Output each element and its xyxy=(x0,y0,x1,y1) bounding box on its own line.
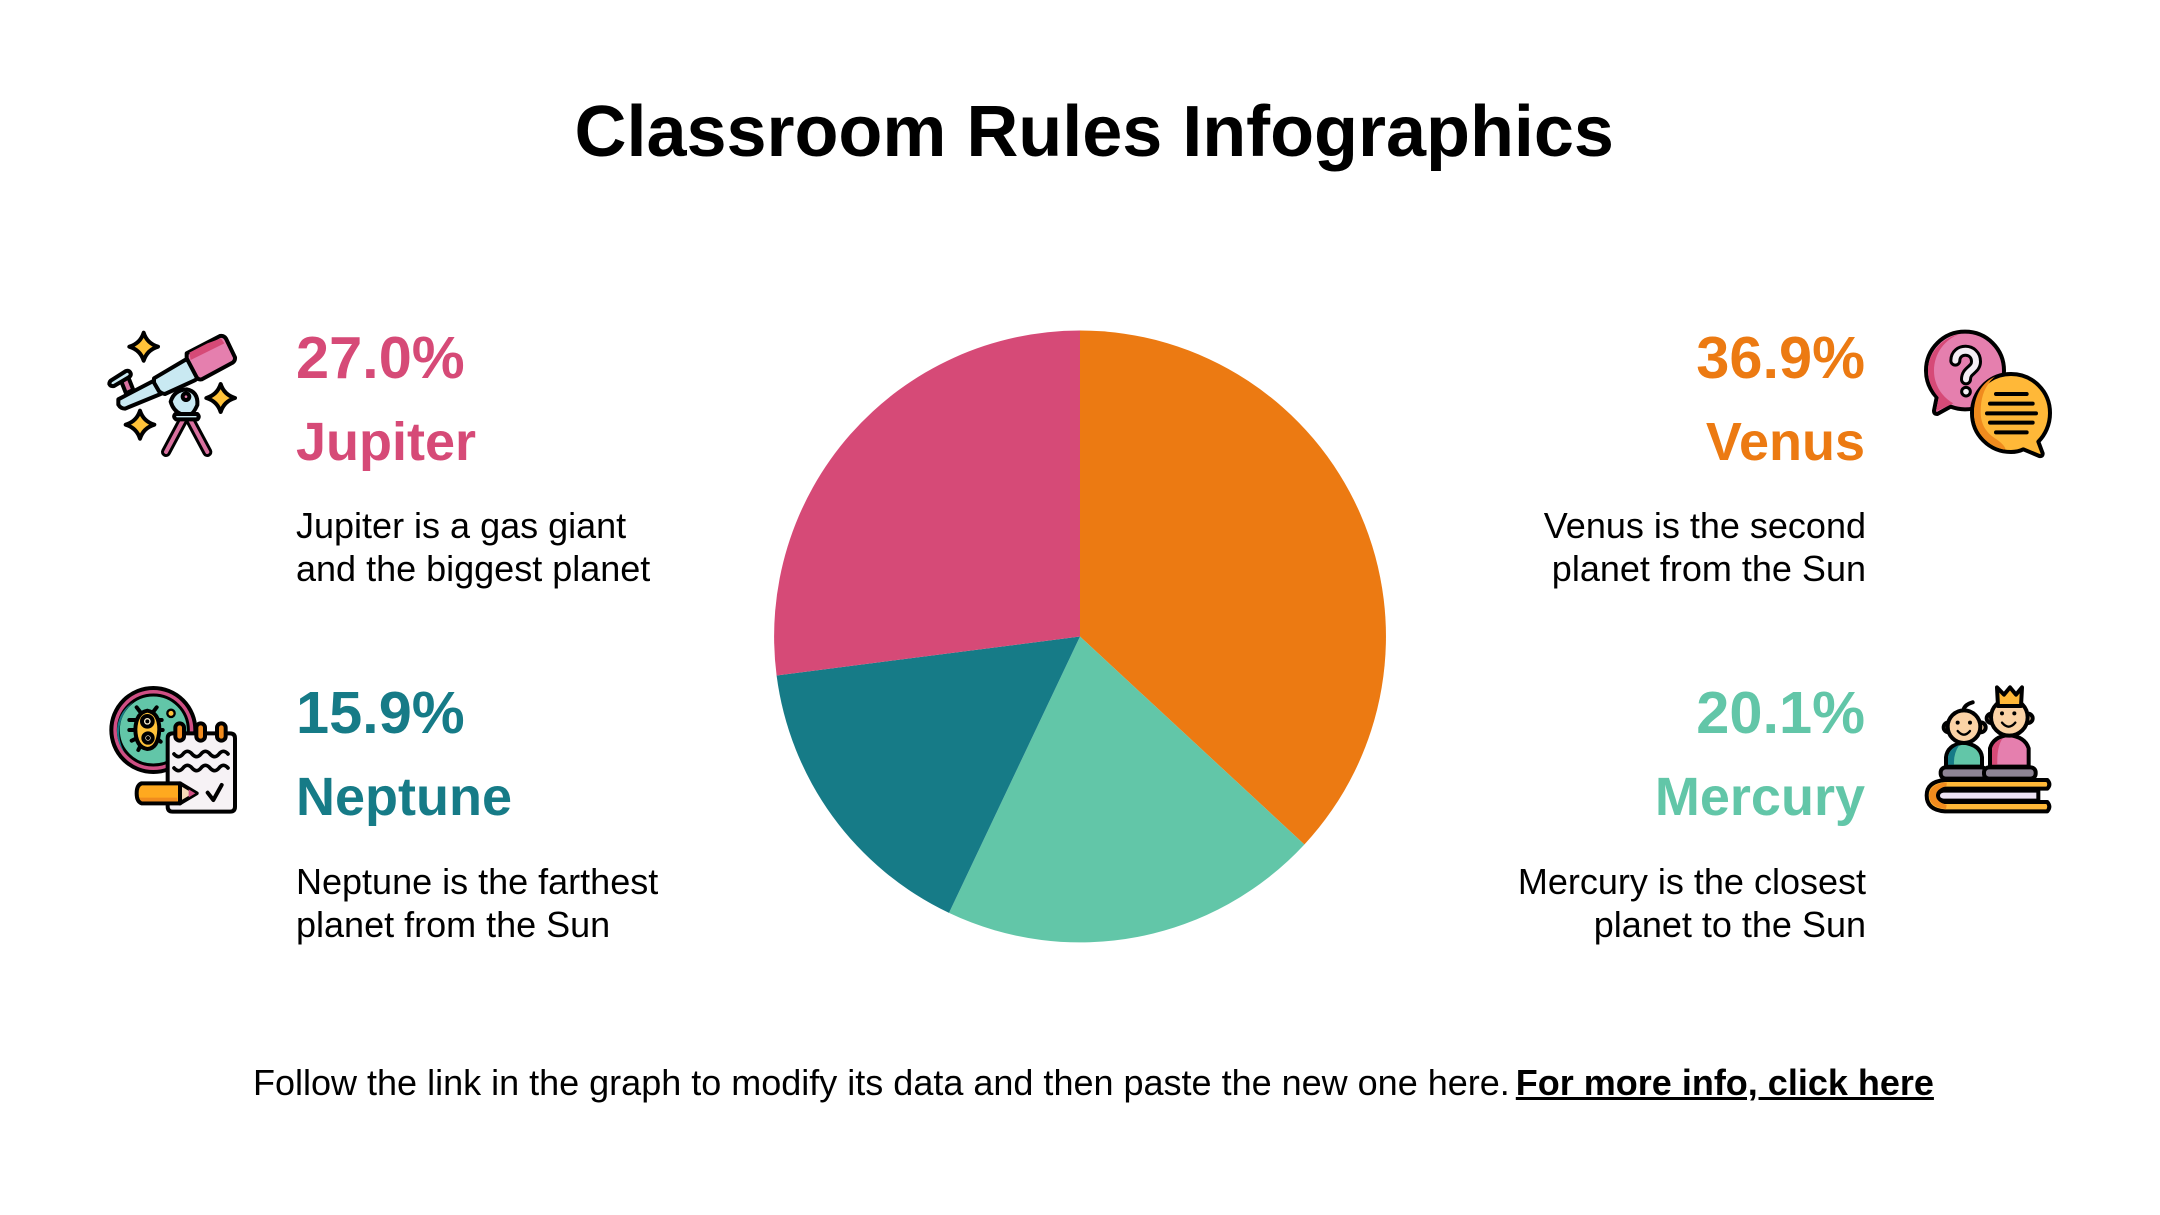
Venus description: planet from the Sun xyxy=(1552,548,1866,589)
footer note: Follow the link in the graph to modify its data and then paste the new one here. For more info, click here xyxy=(253,1062,1934,1103)
Neptune description xyxy=(296,860,658,945)
panel: Jupiter xyxy=(296,324,650,589)
Neptune description: planet from the Sun xyxy=(296,904,610,945)
Mercury description: planet to the Sun xyxy=(1594,904,1866,945)
panel: Neptune xyxy=(296,679,658,945)
Mercury description: Mercury is the closest xyxy=(1518,860,1866,902)
Venus description: Venus is the second xyxy=(1544,505,1866,546)
Mercury description xyxy=(1518,860,1866,945)
slice: Venus 36.9% xyxy=(1080,330,1386,844)
Venus description xyxy=(1544,505,1866,589)
Mercury percentage: 20.1% xyxy=(1696,679,1865,746)
Jupiter name: Jupiter xyxy=(296,412,476,472)
icon: telescope xyxy=(107,330,238,457)
icon: children on books xyxy=(1924,685,2052,814)
slice: Jupiter 27.0% xyxy=(774,330,1080,676)
panel: Venus xyxy=(1544,324,1866,589)
icon: speech bubbles xyxy=(1924,330,2052,458)
Neptune description: Neptune is the farthest xyxy=(296,860,658,902)
icon: petri dish and notepad xyxy=(109,686,237,814)
Jupiter description: and the biggest planet xyxy=(296,548,650,589)
Venus percentage: 36.9% xyxy=(1696,324,1865,390)
Jupiter description xyxy=(296,505,650,589)
slice: Neptune 15.9% xyxy=(777,636,1080,913)
Neptune name: Neptune xyxy=(296,766,512,826)
title: Classroom Rules Infographics xyxy=(574,92,1614,172)
Jupiter percentage: 27.0% xyxy=(296,324,465,390)
Jupiter description: Jupiter is a gas giant xyxy=(296,505,626,546)
panel: Mercury xyxy=(1518,679,1866,945)
slice: Mercury 20.1% xyxy=(949,636,1304,942)
Venus name: Venus xyxy=(1706,412,1865,472)
Neptune percentage: 15.9% xyxy=(296,679,465,746)
Mercury name: Mercury xyxy=(1655,766,1865,826)
